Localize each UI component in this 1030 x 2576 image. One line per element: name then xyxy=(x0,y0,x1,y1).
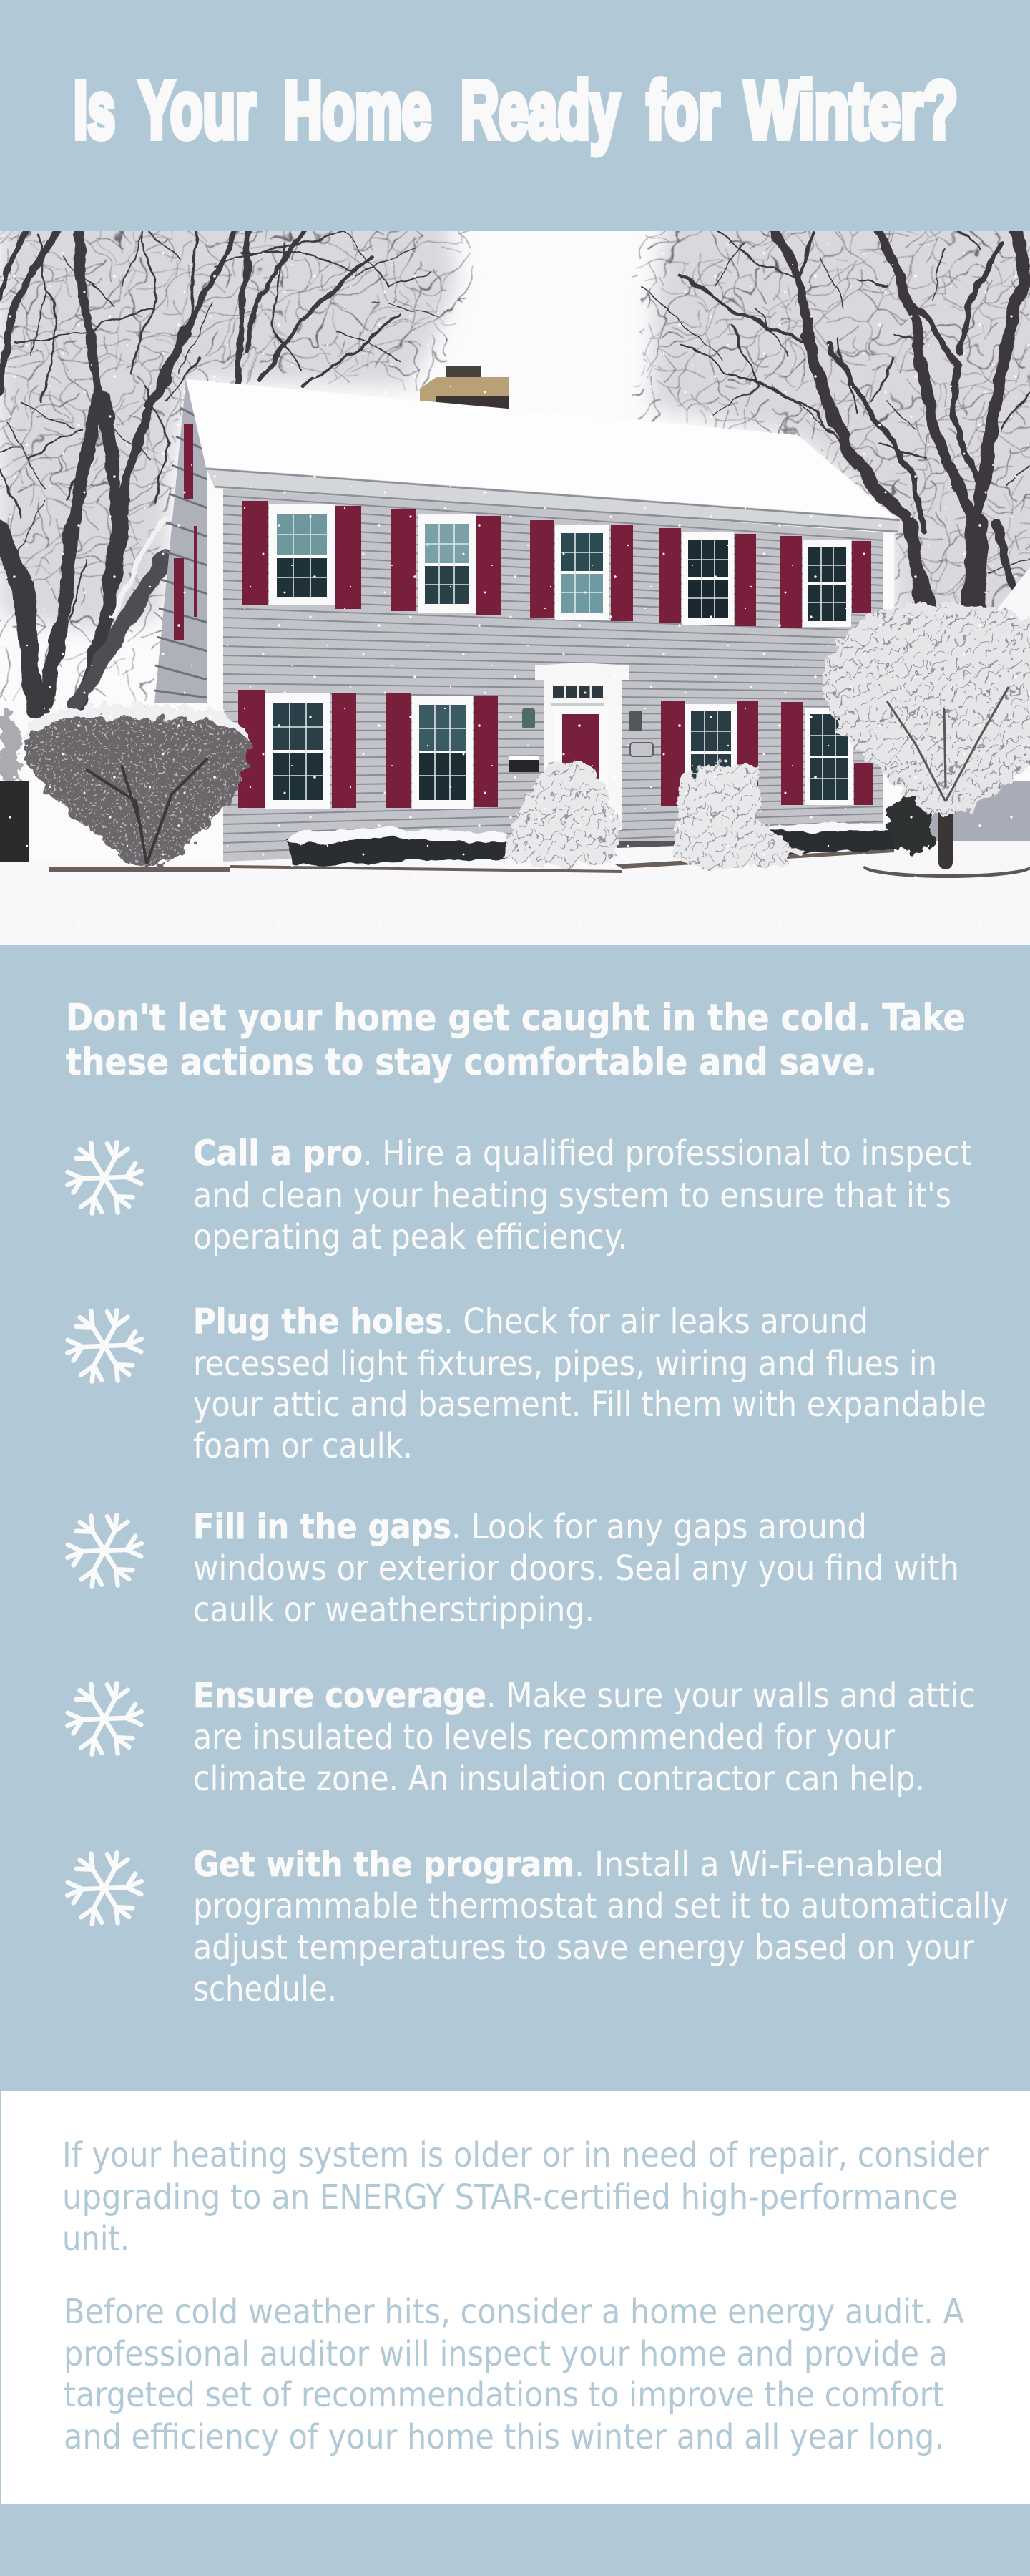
front hedges xyxy=(285,823,896,864)
tip text xyxy=(193,1507,959,1630)
tip text: adjust temperatures to save energy based on your xyxy=(193,1928,974,1968)
steps xyxy=(617,841,675,848)
title: Home xyxy=(284,64,431,155)
tip text: schedule. xyxy=(193,1969,337,2009)
right frosted tree xyxy=(823,603,1030,862)
chimney xyxy=(420,366,509,409)
tip 2: plug the holes xyxy=(67,1302,986,1466)
right trees xyxy=(644,229,1030,615)
paragraph: upgrade heating system: If your heating system is older or in need of repair, consider xyxy=(62,2135,989,2175)
paragraph: upgrade heating system: upgrading to an ENERGY STAR-certified high-performance xyxy=(62,2177,958,2218)
front door with pediment xyxy=(535,663,629,830)
tip text: climate zone. An insulation contractor can help. xyxy=(193,1759,925,1799)
title: Is xyxy=(74,64,115,155)
upper row of windows xyxy=(269,504,851,627)
title: Ready xyxy=(461,64,619,155)
paragraph: home energy audit xyxy=(64,2292,964,2457)
tip text: windows or exterior doors. Seal any you find with xyxy=(193,1548,959,1589)
tip text: Call a pro xyxy=(193,1133,363,1174)
tip text: Fill in the gaps xyxy=(193,1507,451,1547)
tip text: Plug the holes xyxy=(193,1302,443,1342)
intro heading: Don't let your home get caught in the cold. Take xyxy=(66,997,966,1040)
front wall with siding xyxy=(207,478,894,862)
tip 3: fill in the gaps xyxy=(67,1507,959,1630)
paragraph: home energy audit: and efficiency of your home this winter and all year long. xyxy=(64,2417,944,2457)
icon: snowflake xyxy=(67,1849,142,1928)
falling snow xyxy=(9,243,1030,877)
eave and soffit xyxy=(206,467,900,532)
tip text: caulk or weatherstripping. xyxy=(193,1590,594,1630)
intro heading xyxy=(66,997,966,1084)
title: Your xyxy=(139,64,256,155)
tip text: operating at peak efficiency. xyxy=(193,1217,627,1257)
lower row of windows xyxy=(265,693,853,809)
left bush branches xyxy=(86,758,207,864)
tip 5: get with the program xyxy=(67,1845,1009,2009)
tip text: . Look for any gaps around xyxy=(451,1507,867,1547)
fence at far left xyxy=(0,781,29,862)
icon: snowflake xyxy=(67,1307,142,1385)
tip text: and clean your heating system to ensure that it's xyxy=(193,1176,951,1216)
tip text xyxy=(193,1133,972,1257)
dark evergreen behind tree xyxy=(887,791,932,850)
gable side wall xyxy=(154,379,207,703)
tip text xyxy=(193,1676,976,1799)
tip text: Get with the program xyxy=(193,1845,574,1885)
red shutters xyxy=(238,501,873,808)
tip text: foam or caulk. xyxy=(193,1426,413,1466)
icon: snowflake xyxy=(67,1138,142,1217)
intro heading: these actions to stay comfortable and save. xyxy=(66,1041,877,1084)
neighbouring house at right xyxy=(930,567,1030,841)
paragraph: home energy audit: targeted set of recommendations to improve the comfort xyxy=(64,2375,944,2415)
icon: snowflake xyxy=(67,1511,142,1590)
tip text: . Hire a qualified professional to inspect xyxy=(363,1133,972,1174)
roof with snow xyxy=(186,379,896,519)
tip text: Ensure coverage xyxy=(193,1676,486,1716)
tip text: your attic and basement. Fill them with expandable xyxy=(193,1385,986,1425)
lanterns, mailbox and plaque xyxy=(509,708,653,772)
panel: extra advice xyxy=(1,2091,1030,2504)
tip text: . Install a Wi-Fi-enabled xyxy=(574,1845,943,1885)
tip text: programmable thermostat and set it to automatically xyxy=(193,1886,1009,1926)
tree canopy haze xyxy=(0,186,1030,701)
white frosted shrubs by the door xyxy=(502,760,801,869)
icon: snowflake xyxy=(67,1679,142,1758)
tip text xyxy=(193,1302,986,1466)
left rounded bush xyxy=(24,704,248,866)
tip text: . Check for air leaks around xyxy=(443,1302,868,1342)
title xyxy=(74,64,958,155)
paragraph: upgrade heating system: unit. xyxy=(62,2219,129,2259)
paragraph: upgrade heating system xyxy=(62,2135,989,2259)
paragraph: home energy audit: professional auditor will inspect your home and provide a xyxy=(64,2334,948,2374)
tip text: are insulated to levels recommended for your xyxy=(193,1717,895,1757)
tip text: . Make sure your walls and attic xyxy=(486,1676,976,1716)
tip text xyxy=(193,1845,1009,2009)
title: for xyxy=(647,64,720,155)
tip 1: call a pro xyxy=(67,1133,972,1257)
tip 4: ensure coverage xyxy=(67,1676,976,1799)
faint bushes at far left xyxy=(0,708,21,780)
photo: snowy colonial house xyxy=(0,186,1030,945)
tip text: recessed light fixtures, pipes, wiring and flues in xyxy=(193,1344,937,1384)
left trees xyxy=(0,231,436,716)
ground snow xyxy=(49,846,1030,878)
paragraph: home energy audit: Before cold weather hits, consider a home energy audit. A xyxy=(64,2292,964,2332)
